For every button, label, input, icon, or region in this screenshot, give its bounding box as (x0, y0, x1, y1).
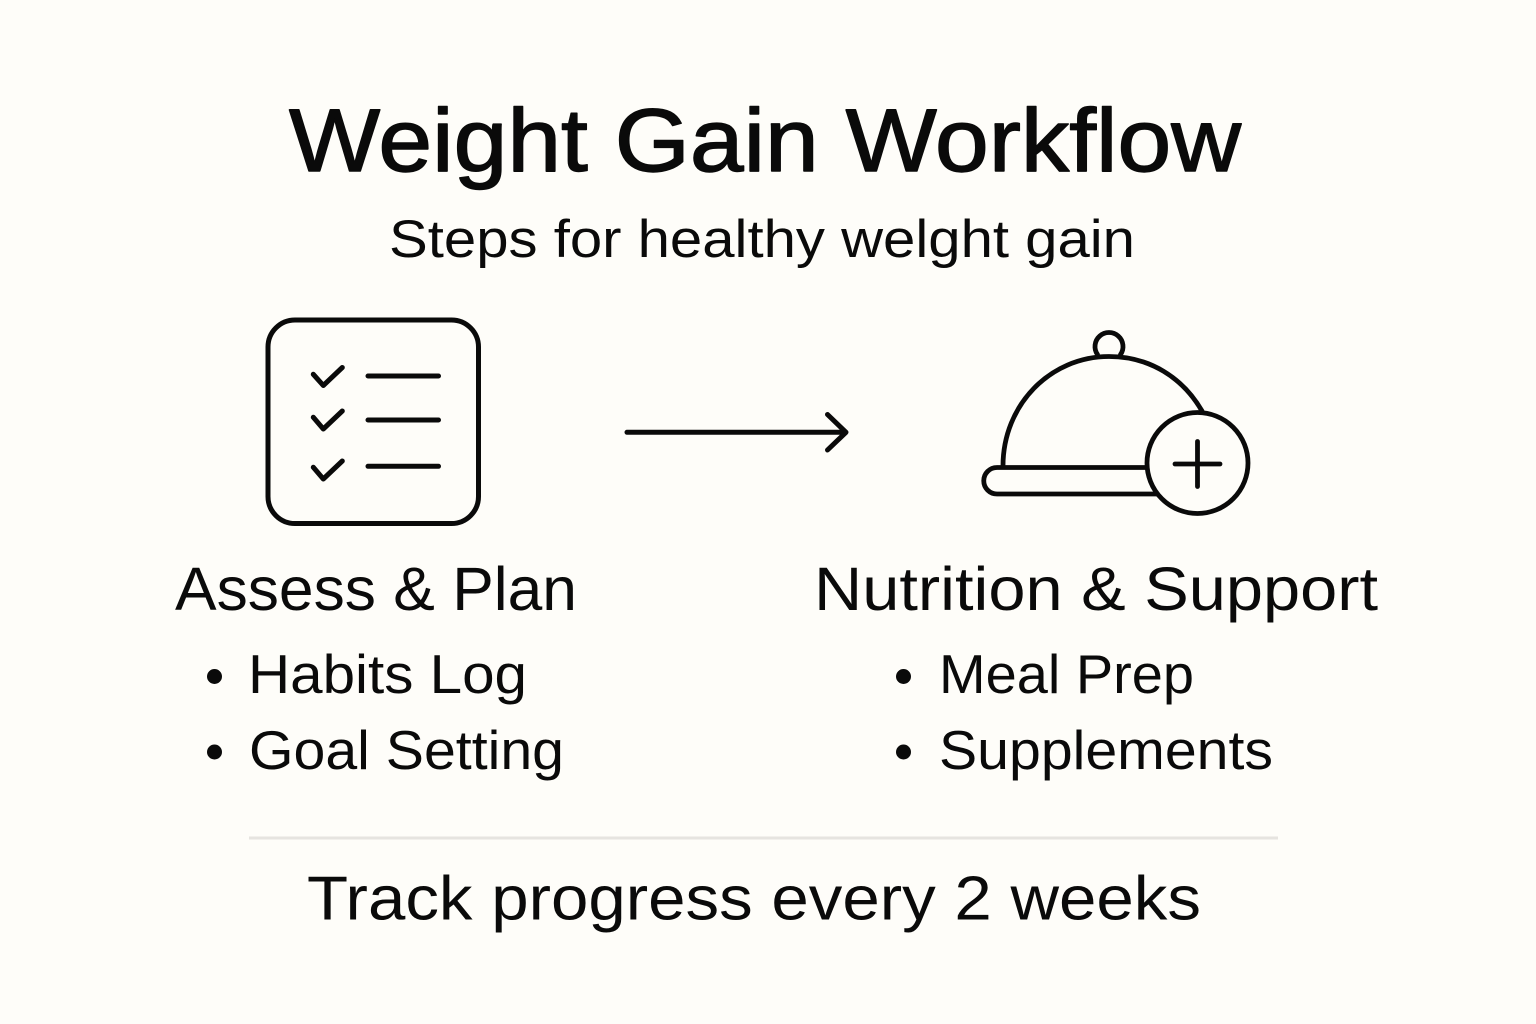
icon: food cloche with plus (984, 333, 1248, 514)
arrow (627, 414, 846, 450)
left list (207, 643, 564, 781)
footer note: Track progress every 2 weeks (307, 864, 1201, 934)
left heading: Assess & Plan (175, 555, 577, 623)
right list: Supplements (939, 719, 1273, 781)
right list: Meal Prep (939, 643, 1194, 705)
left list: Goal Setting (249, 719, 564, 781)
right list (896, 643, 1273, 781)
left list: Habits Log (248, 643, 527, 705)
right heading: Nutrition & Support (814, 555, 1378, 623)
icon: checklist (268, 320, 478, 524)
title: Weight Gain Workflow (289, 90, 1242, 190)
subtitle: Steps for healthy welght gain (389, 210, 1135, 269)
